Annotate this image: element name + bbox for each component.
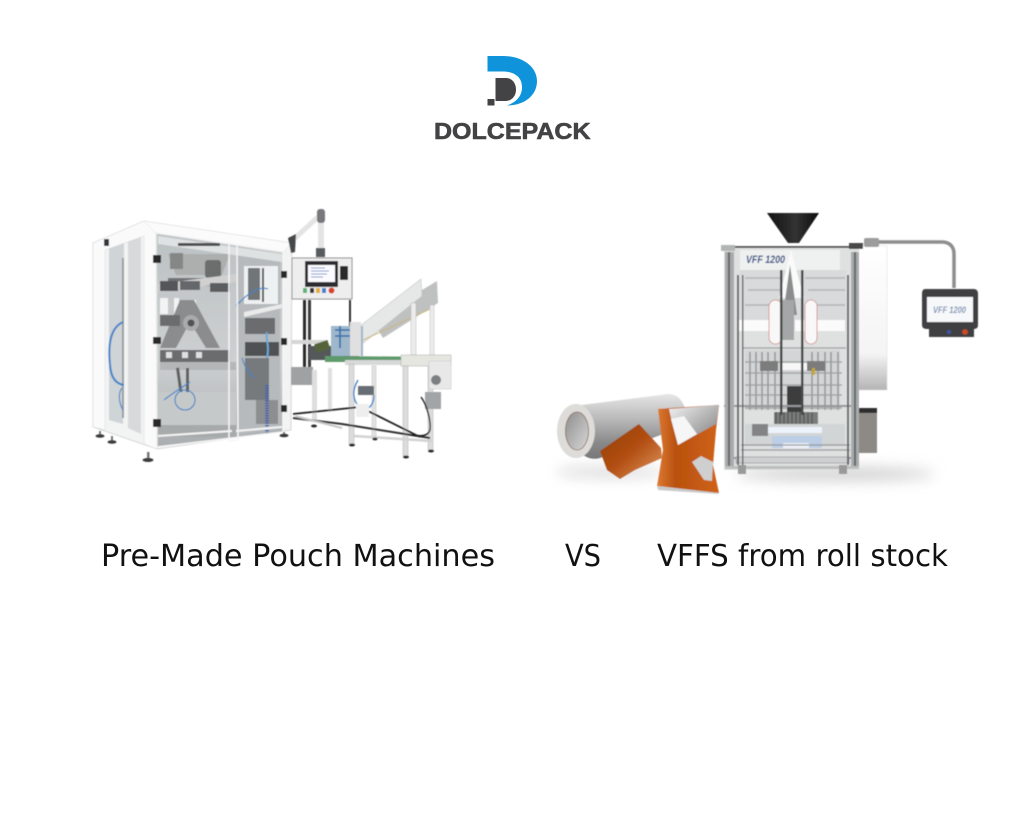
logo wordmark: DOLCEPACK <box>434 118 591 144</box>
machine frame <box>721 243 863 474</box>
mechanism detail <box>158 253 282 437</box>
heading: VFFS from roll stock: VFFS from roll stock <box>657 539 949 574</box>
control panel <box>292 258 352 370</box>
heading: pre-made pouch machines: Pre-Made Pouch Machines <box>101 539 495 574</box>
blue air hoses <box>109 288 268 433</box>
pouch <box>657 405 719 494</box>
image: VFFS machine <box>721 213 978 481</box>
logo: Dolcepack <box>434 56 591 144</box>
image: film roll and pouch <box>555 394 719 494</box>
roll shadow <box>555 466 665 478</box>
orange film sheet <box>600 424 662 479</box>
touchscreen: VFF 1200 <box>933 305 966 315</box>
icon: D mark <box>488 56 537 106</box>
conveyor and frame <box>291 322 451 458</box>
touchscreen arm <box>866 242 954 288</box>
image: pre-made pouch machine <box>93 209 451 462</box>
touchscreen <box>922 289 978 337</box>
control arm <box>288 209 325 257</box>
heading: VS: VS <box>565 539 601 574</box>
brand label: VFF 1200: VFF 1200 <box>746 254 786 266</box>
side panel <box>858 246 887 453</box>
machine cabinet <box>93 221 292 449</box>
door hinges <box>104 239 287 427</box>
film roll <box>557 394 687 459</box>
pouch magazine chute <box>360 279 438 355</box>
arm joint <box>864 238 879 247</box>
machine feet <box>96 431 288 462</box>
ground shadow <box>735 467 935 481</box>
hopper funnel <box>767 213 819 243</box>
